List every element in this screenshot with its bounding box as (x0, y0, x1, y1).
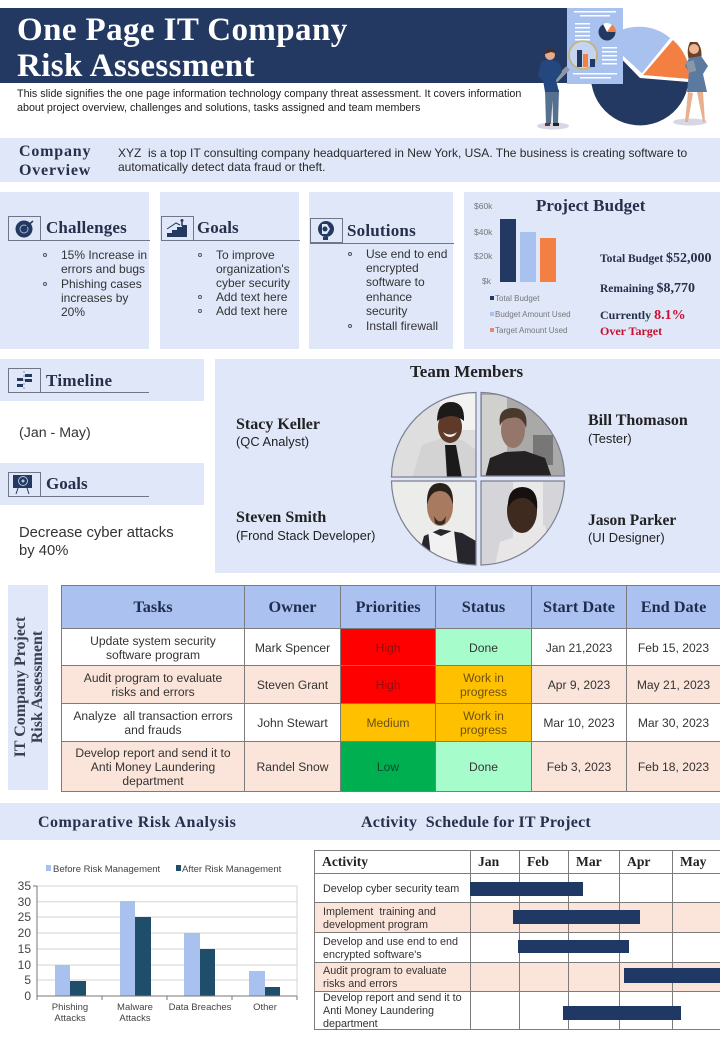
member: Steven Smith: Steven Smith (236, 509, 326, 526)
currently over target: Over Target (600, 324, 662, 338)
panel: project budget (464, 192, 720, 349)
member: Jason Parker (588, 512, 676, 545)
overview text: automatically detect data fraud or theft. (118, 160, 325, 174)
panel: challenges: Phishing cases (61, 277, 142, 291)
panel: challenges: increases by (61, 291, 128, 305)
risk table: Mark Spencer (255, 640, 330, 654)
risk table: High (376, 678, 400, 692)
currently over target (600, 308, 686, 338)
challenges list (43, 248, 147, 319)
bar chart: comparative risk: 20 (18, 926, 31, 940)
panel: solutions: Use end to end (366, 247, 447, 261)
heading: company overview (19, 143, 91, 179)
panel: solutions: enhance (366, 290, 412, 304)
panel: goals heading (0, 463, 204, 505)
bar chart: comparative risk: 35 (18, 879, 31, 893)
activity schedule table: Activity (322, 854, 368, 869)
bar chart: comparative risk: 15 (18, 942, 31, 956)
heading: company overview: Company (19, 143, 91, 160)
risk table: John Stewart (257, 716, 328, 730)
panel: solutions: security (366, 304, 407, 318)
risk table: risks and errors (111, 685, 195, 699)
bar chart: comparative risk: Attacks (119, 1013, 151, 1024)
goals text (19, 525, 174, 559)
risk table: Jan 21,2023 (546, 640, 612, 654)
panel: goals: Add text here (216, 304, 287, 318)
goals text: Decrease cyber attacks (19, 525, 174, 541)
side label text (12, 616, 46, 757)
bar chart: budget: $k (482, 276, 492, 286)
panel: solutions: software to (366, 275, 425, 289)
bar chart: budget: $20k (474, 251, 493, 261)
intro text: about project overview, challenges and solutions, tasks assigned and team members (17, 102, 420, 114)
bar chart: budget: Budget Amount Used (495, 310, 571, 319)
activity schedule table: Audit program to evaluate (323, 965, 447, 977)
panel: company overview (0, 138, 720, 182)
member: Bill Thomason: Bill Thomason (588, 412, 688, 429)
team photo circle (390, 392, 566, 566)
risk table: Mar 30, 2023 (638, 716, 709, 730)
bar chart: comparative risk: 30 (18, 895, 31, 909)
icon: target (8, 216, 41, 241)
risk table: High (376, 640, 400, 654)
bar chart: budget: $60k (474, 201, 493, 211)
panel: goals: To improve (216, 248, 275, 262)
title: One Page IT Company (17, 12, 348, 48)
title: Risk Assessment (17, 48, 255, 84)
icon: climbing steps (161, 216, 194, 241)
icon: target board (8, 472, 41, 497)
risk table: Analyze all transaction errors (73, 709, 233, 723)
risk table: Work in (463, 709, 504, 723)
bar chart: comparative risk: Data Breaches (169, 1002, 232, 1013)
risk table: Priorities (355, 597, 421, 616)
activity schedule table: risks and errors (323, 978, 397, 990)
heading: goals: Goals (46, 474, 88, 493)
activity schedule table: Mar (576, 854, 602, 869)
illustration: analysts with pie chart and report (537, 8, 708, 130)
activity schedule table (314, 850, 720, 1030)
risk table: Anti Money Laundering (91, 760, 215, 774)
panel: goals: cyber security (216, 276, 290, 290)
member: Bill Thomason: (Tester) (588, 431, 632, 446)
risk table: Develop report and send it to (75, 746, 231, 760)
member: Steven Smith (236, 509, 375, 543)
activity schedule table: Feb (527, 854, 549, 869)
risk table: Tasks (133, 597, 173, 616)
panel: challenges (0, 192, 149, 349)
bar chart: budget: Target Amount Used (495, 326, 567, 335)
panel: solutions (309, 192, 453, 349)
panel: challenges: errors and bugs (61, 262, 145, 276)
risk table: Owner (269, 597, 316, 616)
activity schedule table: Jan (478, 854, 499, 869)
bar chart: comparative risk: Phishing (52, 1002, 88, 1013)
risk table: Randel Snow (257, 760, 328, 774)
panel: goals: organization's (216, 262, 290, 276)
panel: challenges: 20% (61, 305, 85, 319)
risk table: Feb 18, 2023 (638, 760, 709, 774)
activity schedule table: encrypted software's (323, 948, 422, 960)
intro text (17, 88, 521, 114)
activity schedule table: May (680, 854, 706, 869)
side label text: IT Company Project (12, 617, 29, 757)
heading: activity schedule: Activity Schedule for IT Project (361, 814, 591, 831)
bar chart: comparative risk: After Risk Management (182, 864, 282, 875)
member: Stacy Keller: Stacy Keller (236, 416, 320, 433)
side label text: Risk Assessment (29, 631, 46, 743)
overview text (118, 146, 687, 174)
activity schedule table: development program (323, 918, 428, 930)
panel: timeline (0, 359, 204, 401)
heading: solutions: Solutions (347, 221, 416, 240)
currently over target: Currently 8.1% (600, 308, 686, 323)
bar chart: comparative risk: 5 (24, 973, 31, 987)
risk table: Done (469, 760, 498, 774)
risk table: progress (460, 685, 507, 699)
activity schedule table: Develop cyber security team (323, 882, 459, 894)
remaining: Remaining $8,770 (600, 281, 695, 296)
panel: team members (215, 359, 720, 573)
risk table: and frauds (124, 723, 182, 737)
heading: comparative risk analysis: Comparative Risk Analysis (38, 814, 236, 831)
risk table: Feb 3, 2023 (547, 760, 611, 774)
intro text: This slide signifies the one page information technology company threat assessment. It covers information (17, 88, 521, 100)
bar chart: comparative risk: Attacks (54, 1013, 86, 1024)
bar chart: budget (474, 201, 571, 335)
activity schedule table: Implement training and (323, 906, 436, 918)
icon: timeline (8, 368, 41, 393)
goals text: by 40% (19, 543, 68, 559)
risk table: Apr 9, 2023 (548, 678, 610, 692)
bar chart: comparative risk (18, 864, 298, 1024)
risk table: Audit program to evaluate (84, 671, 222, 685)
bar chart: comparative risk: Before Risk Management (53, 864, 161, 875)
activity schedule table: Develop report and send it to (323, 992, 462, 1004)
member: Stacy Keller: (QC Analyst) (236, 434, 309, 449)
risk table: End Date (641, 597, 706, 616)
solutions list (348, 247, 447, 333)
bar chart: comparative risk: 0 (24, 989, 31, 1003)
heading: project budget: Project Budget (536, 196, 645, 214)
activity schedule table: Develop and use end to end (323, 936, 458, 948)
risk table: Done (469, 640, 498, 654)
risk table: Medium (366, 716, 410, 730)
overview text: XYZ is a top IT consulting company headquartered in New York, USA. The business is creating software to (118, 146, 687, 160)
member: Stacy Keller (236, 416, 320, 449)
member: Bill Thomason (588, 412, 688, 446)
panel: solutions: encrypted (366, 261, 419, 275)
bar chart: comparative risk: 10 (18, 958, 31, 972)
heading: timeline: Timeline (46, 371, 112, 390)
member: Jason Parker: (UI Designer) (588, 530, 665, 545)
risk table: Work in (463, 671, 504, 685)
total budget: Total Budget $52,000 (600, 251, 712, 266)
panel: goals: Add text here (216, 290, 287, 304)
bar chart: comparative risk: 25 (18, 910, 31, 924)
title (17, 12, 348, 84)
bar chart: comparative risk: Malware (117, 1002, 153, 1013)
member: Steven Smith: (Frond Stack Developer) (236, 528, 375, 543)
risk table: Status (462, 597, 505, 616)
activity schedule table: Apr (627, 854, 650, 869)
panel: challenges: 15% Increase in (61, 248, 147, 262)
gantt bars (470, 882, 720, 1020)
risk table: Steven Grant (257, 678, 328, 692)
heading: team members: Team Members (410, 362, 523, 381)
bar chart: budget: Total Budget (495, 294, 540, 303)
risk table: software program (106, 648, 200, 662)
bar chart: budget: $40k (474, 227, 493, 237)
risk table (61, 585, 720, 792)
heading: challenges: Challenges (46, 218, 127, 237)
panel: goals (160, 192, 299, 349)
risk table: May 21, 2023 (637, 678, 710, 692)
section band: analysis headings (0, 803, 720, 840)
icon: gear bulb (310, 218, 343, 243)
risk table: Update system security (90, 634, 216, 648)
risk table: Feb 15, 2023 (638, 640, 709, 654)
heading: company overview: Overview (19, 162, 91, 179)
risk table: department (122, 774, 184, 788)
side label: risk assessment (8, 585, 48, 790)
heading: goals: Goals (197, 218, 239, 237)
timeline text: (Jan - May) (19, 425, 91, 441)
risk table: progress (460, 723, 507, 737)
activity schedule table: department (323, 1018, 378, 1030)
risk table: Mar 10, 2023 (543, 716, 615, 730)
member: Jason Parker: Jason Parker (588, 512, 676, 529)
header banner (0, 8, 567, 83)
bar chart: comparative risk: Other (253, 1002, 277, 1013)
risk table: Low (377, 760, 399, 774)
goals list (198, 248, 290, 318)
panel: solutions: Install firewall (366, 319, 438, 333)
risk table: Start Date (543, 597, 615, 616)
activity schedule table: Anti Money Laundering (323, 1005, 434, 1017)
